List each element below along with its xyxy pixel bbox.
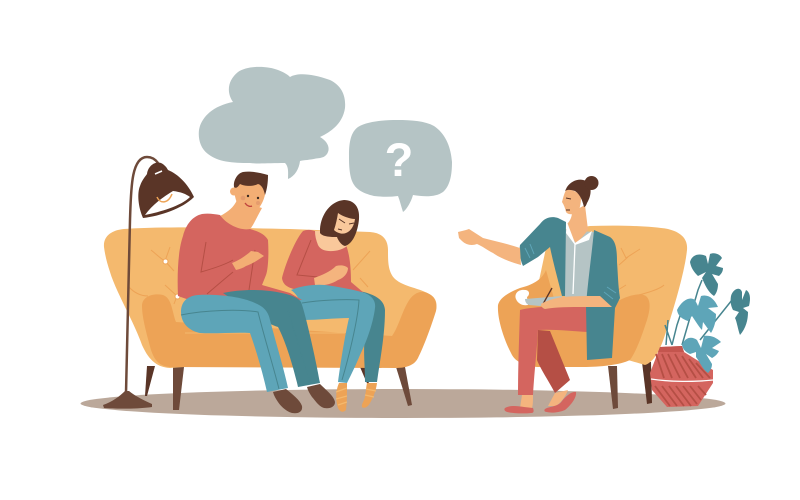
plant pot <box>650 346 713 407</box>
sofa back <box>104 227 436 368</box>
therapist jacket right <box>586 230 620 360</box>
woman <box>282 200 385 412</box>
armchair seat and arms <box>498 270 650 367</box>
plant stems <box>665 280 732 345</box>
therapist jacket left <box>520 217 566 296</box>
sofa seat and arms <box>142 292 436 368</box>
therapist sleeve cuffs <box>525 244 616 299</box>
armchair tufts <box>618 248 664 297</box>
armchair back <box>537 226 687 365</box>
speech bubble: thought cloud <box>199 67 345 179</box>
woman back leg <box>360 291 385 382</box>
man jeans seams <box>181 310 311 389</box>
lamp pole <box>126 157 158 393</box>
man smile and cheeks <box>241 196 260 206</box>
sofa button tufts <box>128 247 370 304</box>
man front leg <box>181 295 288 392</box>
woman jeans seams <box>302 300 359 380</box>
sofa seat highlight <box>185 333 392 334</box>
therapist hair bun <box>584 176 598 190</box>
sofa legs <box>145 366 412 410</box>
therapist placket <box>573 244 575 294</box>
pot stripes <box>655 354 710 406</box>
man shirt <box>178 214 302 302</box>
man hair <box>234 172 268 195</box>
therapist face <box>562 190 581 214</box>
man shirt seams <box>201 242 255 294</box>
woman face details <box>338 219 354 230</box>
therapist neck <box>567 205 588 243</box>
woman socks <box>336 383 377 412</box>
woman hair back <box>320 200 359 246</box>
man hand <box>232 251 264 270</box>
pot band <box>651 379 713 381</box>
man ear <box>230 188 238 196</box>
armchair legs <box>608 362 652 409</box>
leaf: middle <box>677 295 718 333</box>
lamp shade <box>138 163 194 218</box>
therapist hair <box>565 180 591 207</box>
therapist feet and shoes <box>504 390 576 413</box>
therapist collar <box>566 222 592 245</box>
therapist shirt <box>565 230 595 297</box>
man back leg <box>223 290 320 387</box>
pencil <box>543 288 552 304</box>
question mark: ? <box>385 133 413 186</box>
leaf: top <box>690 253 723 296</box>
floor shadow <box>80 389 726 418</box>
woman face <box>334 213 355 234</box>
lamp base <box>103 391 152 409</box>
woman shirt seams <box>297 240 318 277</box>
man head <box>234 176 266 212</box>
leaf: lower <box>682 336 721 373</box>
man <box>178 172 335 413</box>
woman hand <box>314 265 348 285</box>
therapist pants <box>518 306 588 395</box>
therapist forearm <box>541 296 612 309</box>
man neck <box>220 200 262 230</box>
therapist extended arm and hand <box>458 229 521 265</box>
sofa <box>104 227 436 410</box>
woman sock stripes <box>336 388 376 405</box>
bulb <box>157 194 172 202</box>
woman chest <box>315 231 347 251</box>
woman front leg <box>291 285 375 383</box>
pot rim <box>658 346 684 352</box>
therapist face details <box>566 198 571 210</box>
therapist <box>458 176 620 413</box>
woman shirt <box>282 230 364 293</box>
speech bubble: question <box>349 120 452 212</box>
armchair <box>498 226 687 409</box>
potted plant <box>650 253 750 407</box>
man face details <box>247 195 259 199</box>
notebook white page <box>515 290 529 305</box>
notebook <box>525 296 562 306</box>
man shoes <box>273 384 335 413</box>
therapist dark leg <box>537 330 570 393</box>
sofa buttons <box>163 259 180 299</box>
leaf: right <box>731 289 750 335</box>
lamp glow <box>145 191 190 215</box>
floor lamp <box>103 157 194 409</box>
